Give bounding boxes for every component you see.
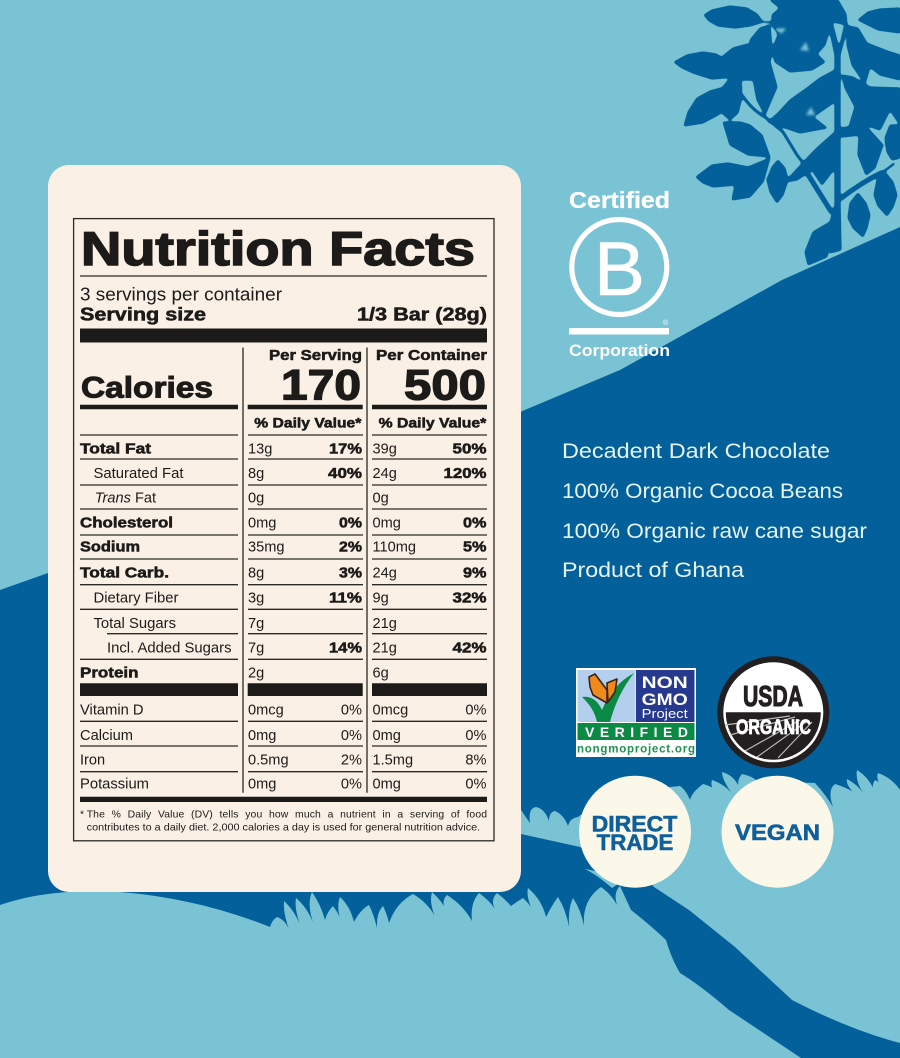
row: dietary fiber: Dietary Fiber: [94, 590, 179, 606]
calories row: 170: [281, 361, 361, 409]
row: calcium: 0%: [465, 728, 487, 744]
footnote: contributes to a daily diet. 2,000 calories a day is used for general nutrition advice.: [87, 823, 480, 834]
row: trans fat: 0g: [248, 490, 264, 506]
badge: non gmo project verified: nongmoproject.org: [577, 744, 695, 756]
row: potassium: 0mg: [248, 777, 276, 793]
badge: usda organic: USDA: [743, 681, 803, 713]
row: total carb: 9%: [463, 565, 486, 582]
row: iron: 1.5mg: [372, 752, 413, 768]
row: dietary fiber: 32%: [452, 589, 486, 606]
row: iron: 2%: [341, 752, 362, 768]
row: cholesterol: 0%: [463, 514, 486, 531]
badge: non gmo project verified: VERIFIED: [585, 724, 688, 740]
row: vitamin d: 0mcg: [372, 702, 408, 718]
badge: usda organic: ORGANIC: [736, 716, 811, 739]
daily value headings: % Daily Value*: [254, 415, 362, 431]
serving size: [80, 304, 487, 324]
row: trans fat: 0g: [372, 490, 389, 506]
serving size: 1/3 Bar (28g): [357, 304, 487, 324]
product claims text: Decadent Dark Chocolate: [562, 440, 830, 463]
row: calcium: Calcium: [80, 728, 133, 744]
row: added sugars: 21g: [372, 641, 397, 657]
badge: non gmo project verified: NON: [642, 673, 688, 692]
row: potassium: Potassium: [80, 777, 149, 793]
row: total fat: 50%: [452, 440, 486, 457]
logo: certified B corporation: [569, 187, 670, 360]
row: total carb: 8g: [248, 566, 264, 582]
product claims text: 100% Organic Cocoa Beans: [562, 480, 843, 503]
row: total sugars: 21g: [372, 616, 397, 632]
badge: vegan: [722, 776, 834, 888]
row: sodium: 110mg: [372, 540, 416, 556]
row: sodium: 35mg: [248, 540, 285, 556]
calories row: 500: [404, 361, 486, 409]
badge: non gmo project verified: [576, 668, 696, 757]
dark blue hillside band: [0, 227, 900, 1058]
product claims text: Product of Ghana: [562, 559, 744, 582]
product claims text: 100% Organic raw cane sugar: [562, 520, 867, 543]
row: added sugars: Incl. Added Sugars: [107, 641, 232, 657]
row: trans fat: [95, 490, 389, 506]
logo: certified B corporation: B: [594, 227, 645, 312]
row: dietary fiber: 3g: [248, 590, 264, 606]
row: added sugars: 7g: [248, 641, 264, 657]
row: calcium: 0mg: [372, 728, 401, 744]
nutrition facts label: [74, 219, 494, 841]
row: total carb: [80, 565, 486, 582]
row: trans fat: Trans Fat: [95, 490, 156, 506]
row: total fat: Total Fat: [80, 440, 151, 457]
footnote: [80, 809, 487, 834]
row: added sugars: 14%: [329, 640, 362, 657]
row: saturated fat: 24g: [372, 466, 397, 482]
footnote: The % Daily Value (DV) tells you how much a nutrient in a serving of food: [87, 809, 487, 820]
row: dietary fiber: 9g: [372, 590, 389, 606]
row: total fat: [80, 440, 486, 457]
badge: direct trade: TRADE: [597, 830, 673, 855]
row: protein: 2g: [248, 665, 264, 681]
row: cholesterol: 0mg: [248, 515, 276, 531]
row: cholesterol: 0%: [339, 514, 362, 531]
calories row: Per Serving: [269, 347, 362, 364]
right light hill with grass: [521, 770, 900, 1043]
row: cholesterol: 0mg: [372, 515, 401, 531]
row: dietary fiber: 11%: [329, 589, 362, 606]
row: saturated fat: [94, 465, 486, 482]
light grass sliver under direct trade badge: [585, 869, 618, 888]
logo: certified B corporation: Corporation: [569, 341, 670, 360]
badge: usda organic: [717, 656, 829, 768]
badge: direct trade: DIRECT: [592, 812, 678, 837]
row: calcium: [80, 728, 487, 744]
row: vitamin d: 0%: [465, 702, 487, 718]
row: vitamin d: 0mcg: [248, 702, 284, 718]
row: calcium: 0mg: [248, 728, 276, 744]
calories row: [81, 347, 487, 409]
row: protein: 6g: [372, 665, 389, 681]
row: cholesterol: [80, 514, 486, 531]
row: added sugars: [107, 640, 486, 657]
daily value headings: [254, 415, 487, 431]
calories row: Per Container: [376, 347, 487, 364]
row: sodium: [80, 539, 486, 556]
row: total sugars: Total Sugars: [94, 616, 176, 632]
title: Nutrition Facts: [81, 222, 475, 275]
row: potassium: [80, 777, 487, 793]
row: vitamin d: [80, 702, 487, 718]
daily value headings: % Daily Value*: [379, 415, 487, 431]
row: total sugars: [94, 616, 397, 632]
logo: certified B corporation: Certified: [569, 187, 670, 213]
row: potassium: 0mg: [372, 777, 401, 793]
row: total sugars: 7g: [248, 616, 264, 632]
row: total carb: 24g: [372, 566, 397, 582]
row: saturated fat: 120%: [444, 465, 486, 482]
row: sodium: 5%: [463, 539, 486, 556]
row: saturated fat: 40%: [328, 465, 362, 482]
row: iron: 8%: [465, 752, 487, 768]
row: total carb: 3%: [339, 565, 362, 582]
row: dietary fiber: [94, 589, 486, 606]
row: sodium: 2%: [339, 539, 362, 556]
row: total carb: Total Carb.: [80, 565, 169, 582]
row: total fat: 13g: [248, 441, 272, 457]
logo: certified B corporation: ®: [663, 319, 669, 327]
row: iron: [80, 752, 487, 768]
product claims text: [562, 440, 867, 582]
servings per container: 3 servings per container: [80, 285, 282, 305]
row: potassium: 0%: [465, 777, 487, 793]
row: total fat: 17%: [329, 440, 362, 457]
badge: non gmo project verified: GMO: [642, 690, 688, 709]
row: calcium: 0%: [341, 728, 362, 744]
serving size: Serving size: [80, 304, 206, 324]
row: potassium: 0%: [341, 777, 362, 793]
row: vitamin d: Vitamin D: [80, 702, 144, 718]
panel: nutrition card: [48, 165, 521, 892]
row: total fat: 39g: [372, 441, 397, 457]
row: added sugars: 42%: [452, 640, 486, 657]
row: iron: Iron: [80, 752, 105, 768]
row: saturated fat: 8g: [248, 466, 264, 482]
calories row: Calories: [81, 371, 213, 404]
row: vitamin d: 0%: [341, 702, 362, 718]
row: protein: [80, 664, 389, 681]
row: cholesterol: Cholesterol: [80, 514, 173, 531]
row: iron: 0.5mg: [248, 752, 289, 768]
row: protein: Protein: [80, 664, 138, 681]
row: sodium: Sodium: [80, 539, 140, 556]
icon: tree silhouette: [674, 0, 900, 265]
badge: direct trade: [579, 776, 691, 888]
badge: non gmo project verified: Project: [642, 706, 688, 721]
row: saturated fat: Saturated Fat: [94, 466, 184, 482]
lower left light hill with grass: [0, 886, 801, 1058]
badge: vegan: VEGAN: [735, 820, 820, 845]
footnote: *: [80, 809, 84, 820]
